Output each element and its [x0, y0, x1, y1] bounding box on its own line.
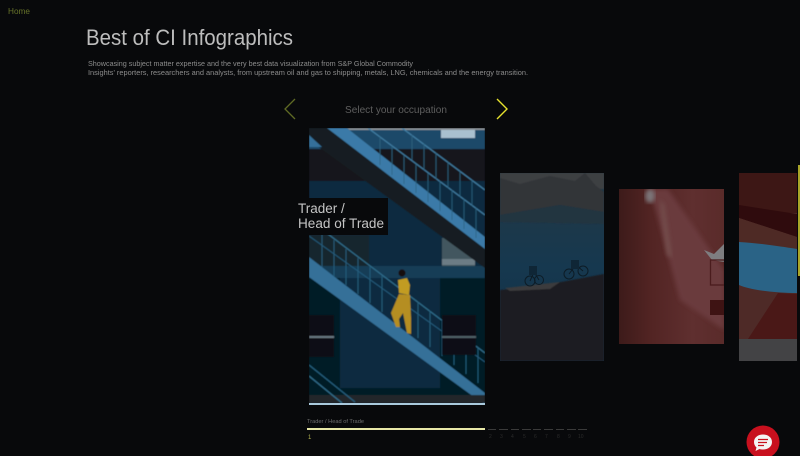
intro text: Insights' reporters, researchers and analysts, from upstream oil and gas to shipping, metals, LNG, chemicals and the energy transition. — [88, 68, 528, 77]
chat button — [746, 426, 780, 456]
painter on cradle — [704, 244, 724, 315]
inactive numbers: 7 — [545, 434, 548, 440]
inactive progress dashes — [488, 428, 587, 430]
active number: 1 — [308, 435, 312, 441]
main card: staircase photo — [309, 128, 485, 405]
card title: Trader / Head of Trade — [298, 198, 388, 235]
active progress bar — [307, 428, 485, 430]
person in yellow — [391, 269, 411, 334]
title: Best of CI Infographics — [86, 25, 293, 50]
intro text — [88, 59, 528, 77]
inactive numbers: 4 — [511, 434, 514, 440]
upper staircase — [309, 128, 485, 268]
inactive numbers: 9 — [568, 434, 571, 440]
card title: Trader / Head of Trade: Trader / — [298, 201, 345, 216]
card 3: painter on a red hull — [619, 189, 724, 344]
inactive numbers: 8 — [557, 434, 560, 440]
inactive numbers: 5 — [523, 434, 526, 440]
next arrow — [497, 99, 507, 119]
inactive numbers: 2 — [489, 434, 492, 440]
pagination — [307, 419, 587, 441]
home link: Home — [8, 6, 30, 16]
cyclists — [525, 260, 588, 286]
card 2: cyclists on a cliff — [500, 173, 604, 361]
inactive numbers: 6 — [534, 434, 537, 440]
previous arrow — [285, 99, 295, 119]
card 4: ship hull — [739, 173, 797, 361]
inactive numbers: 3 — [500, 434, 503, 440]
lower staircase — [309, 228, 485, 405]
right edge marker — [798, 165, 800, 276]
inactive numbers: 10 — [578, 434, 584, 440]
active item label: Trader / Head of Trade — [307, 419, 364, 425]
intro text: Showcasing subject matter expertise and the very best data visualization from S&P Global Commodity — [88, 59, 413, 68]
card title: Trader / Head of Trade: Head of Trade — [298, 216, 384, 231]
inactive numbers — [489, 434, 584, 440]
select your occupation label: Select your occupation — [345, 105, 447, 116]
